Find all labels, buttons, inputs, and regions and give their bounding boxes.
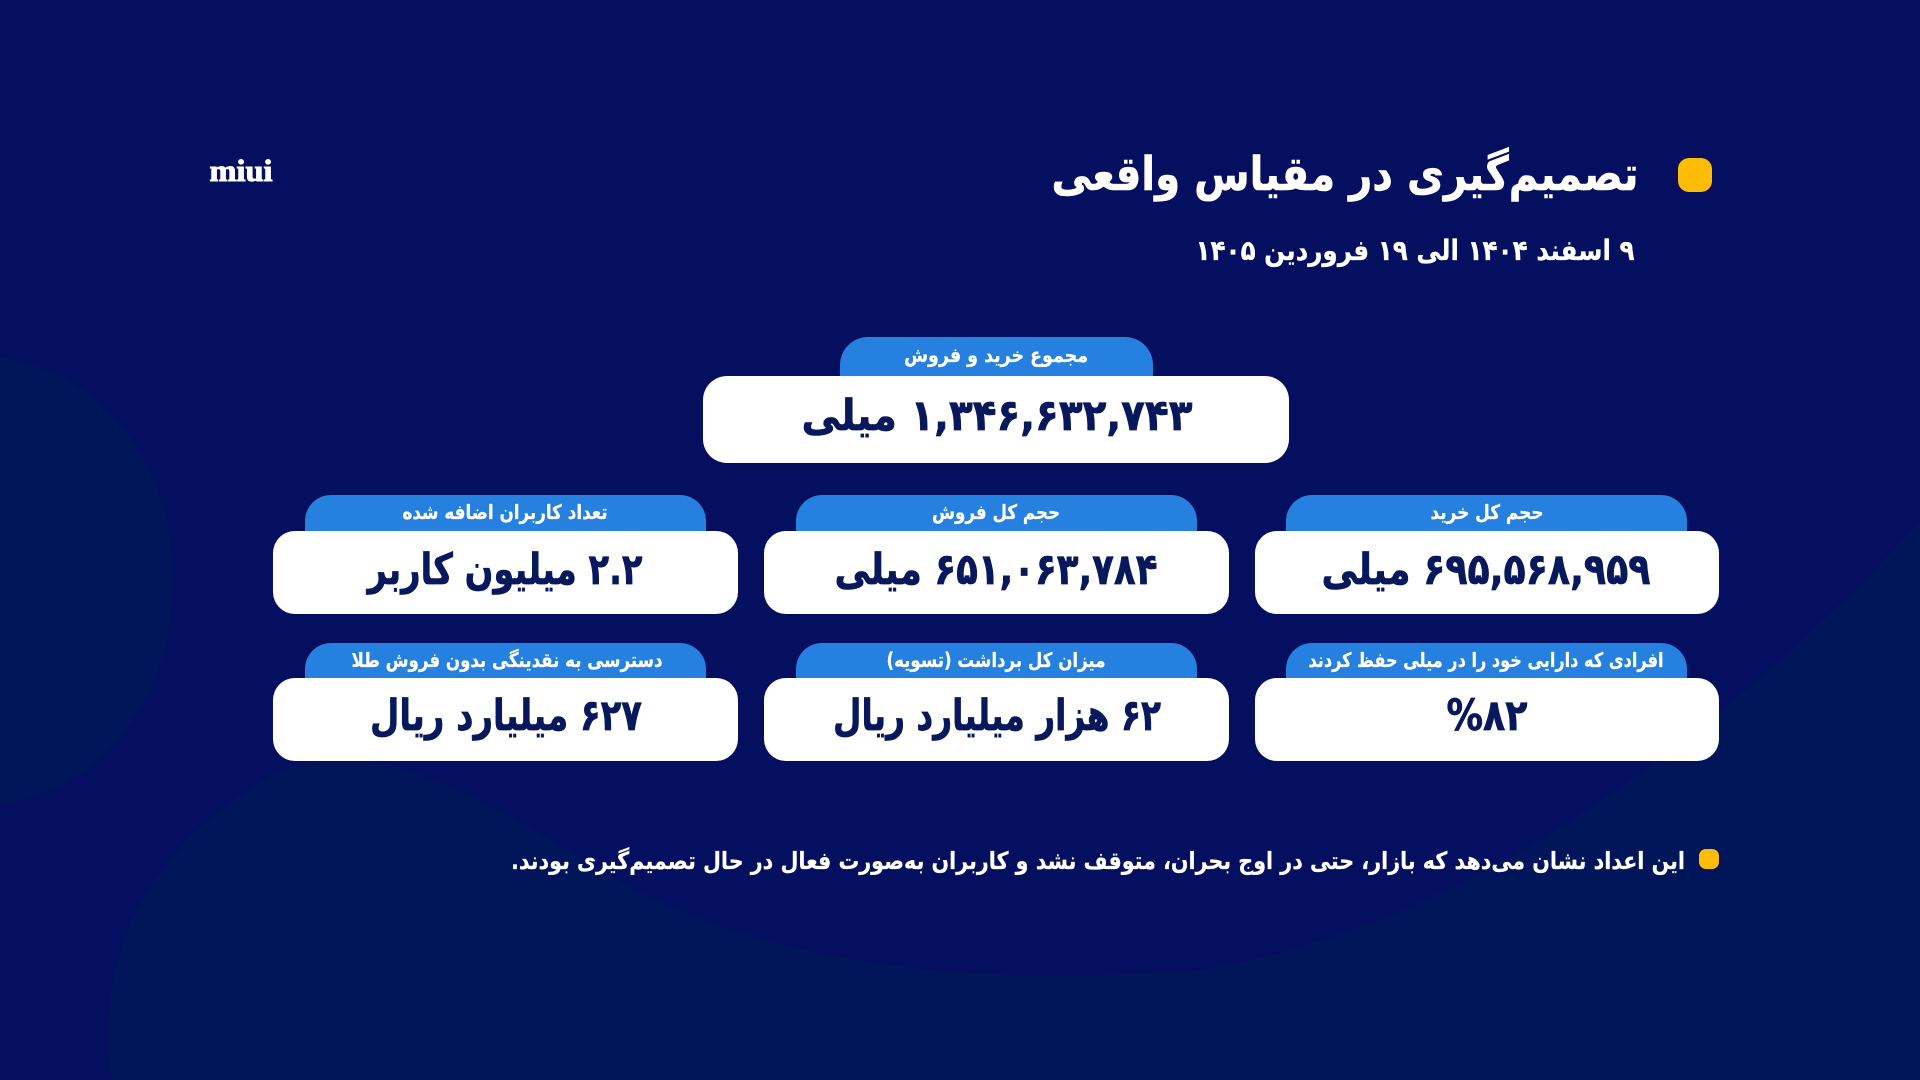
panel: liquidity without selling gold: دسترسی به نقدینگی بدون فروش طلا bbox=[352, 648, 662, 672]
panel: total buy and sell: ۱,۳۴۶,۶۳۲,۷۴۳ میلی bbox=[802, 391, 1192, 441]
footnote: این اعداد نشان می‌دهد که بازار، حتی در اوج بحران، متوقف نشد و کاربران به‌صورت فعال در حال تصمیم‌گیری بودند. bbox=[511, 847, 1685, 875]
panel: people who kept assets bbox=[1255, 643, 1719, 761]
panel: total buy volume: ۶۹۵,۵۶۸,۹۵۹ میلی bbox=[1322, 545, 1650, 595]
panel: total buy volume: حجم کل خرید bbox=[1430, 500, 1544, 524]
logo: miui bbox=[210, 153, 273, 188]
panel: users added: ۲.۲ میلیون کاربر bbox=[366, 545, 642, 595]
icon: title bullet bbox=[1678, 158, 1712, 192]
title: تصمیم‌گیری در مقیاس واقعی bbox=[1052, 147, 1638, 202]
subtitle: date range: ۹ اسفند ۱۴۰۴ الی ۱۹ فروردین ۱۴۰۵ bbox=[1196, 234, 1634, 267]
panel: total sell volume: ۶۵۱,۰۶۳,۷۸۴ میلی bbox=[834, 545, 1158, 595]
panel: liquidity without selling gold: ۶۲۷ میلیارد ریال bbox=[370, 691, 642, 741]
panel: total withdrawals: ۶۲ هزار میلیارد ریال bbox=[833, 691, 1161, 741]
panel: total buy and sell bbox=[703, 337, 1289, 463]
panel: total sell volume: حجم کل فروش bbox=[932, 500, 1060, 524]
panel: users added bbox=[273, 495, 738, 614]
panel: total buy volume bbox=[1255, 495, 1719, 614]
panel: people who kept assets: افرادی که دارایی خود را در میلی حفظ کردند bbox=[1308, 648, 1664, 672]
panel: total withdrawals: میزان کل برداشت (تسویه) bbox=[886, 648, 1106, 672]
panel: total buy and sell: مجموع خرید و فروش bbox=[904, 343, 1088, 367]
icon: footnote bullet bbox=[1699, 849, 1719, 869]
panel: liquidity without selling gold bbox=[273, 643, 738, 761]
panel: people who kept assets: %۸۲ bbox=[1446, 691, 1528, 741]
panel: total sell volume bbox=[764, 495, 1229, 614]
panel: users added: تعداد کاربران اضافه شده bbox=[402, 500, 608, 524]
panel: total withdrawals bbox=[764, 643, 1229, 761]
